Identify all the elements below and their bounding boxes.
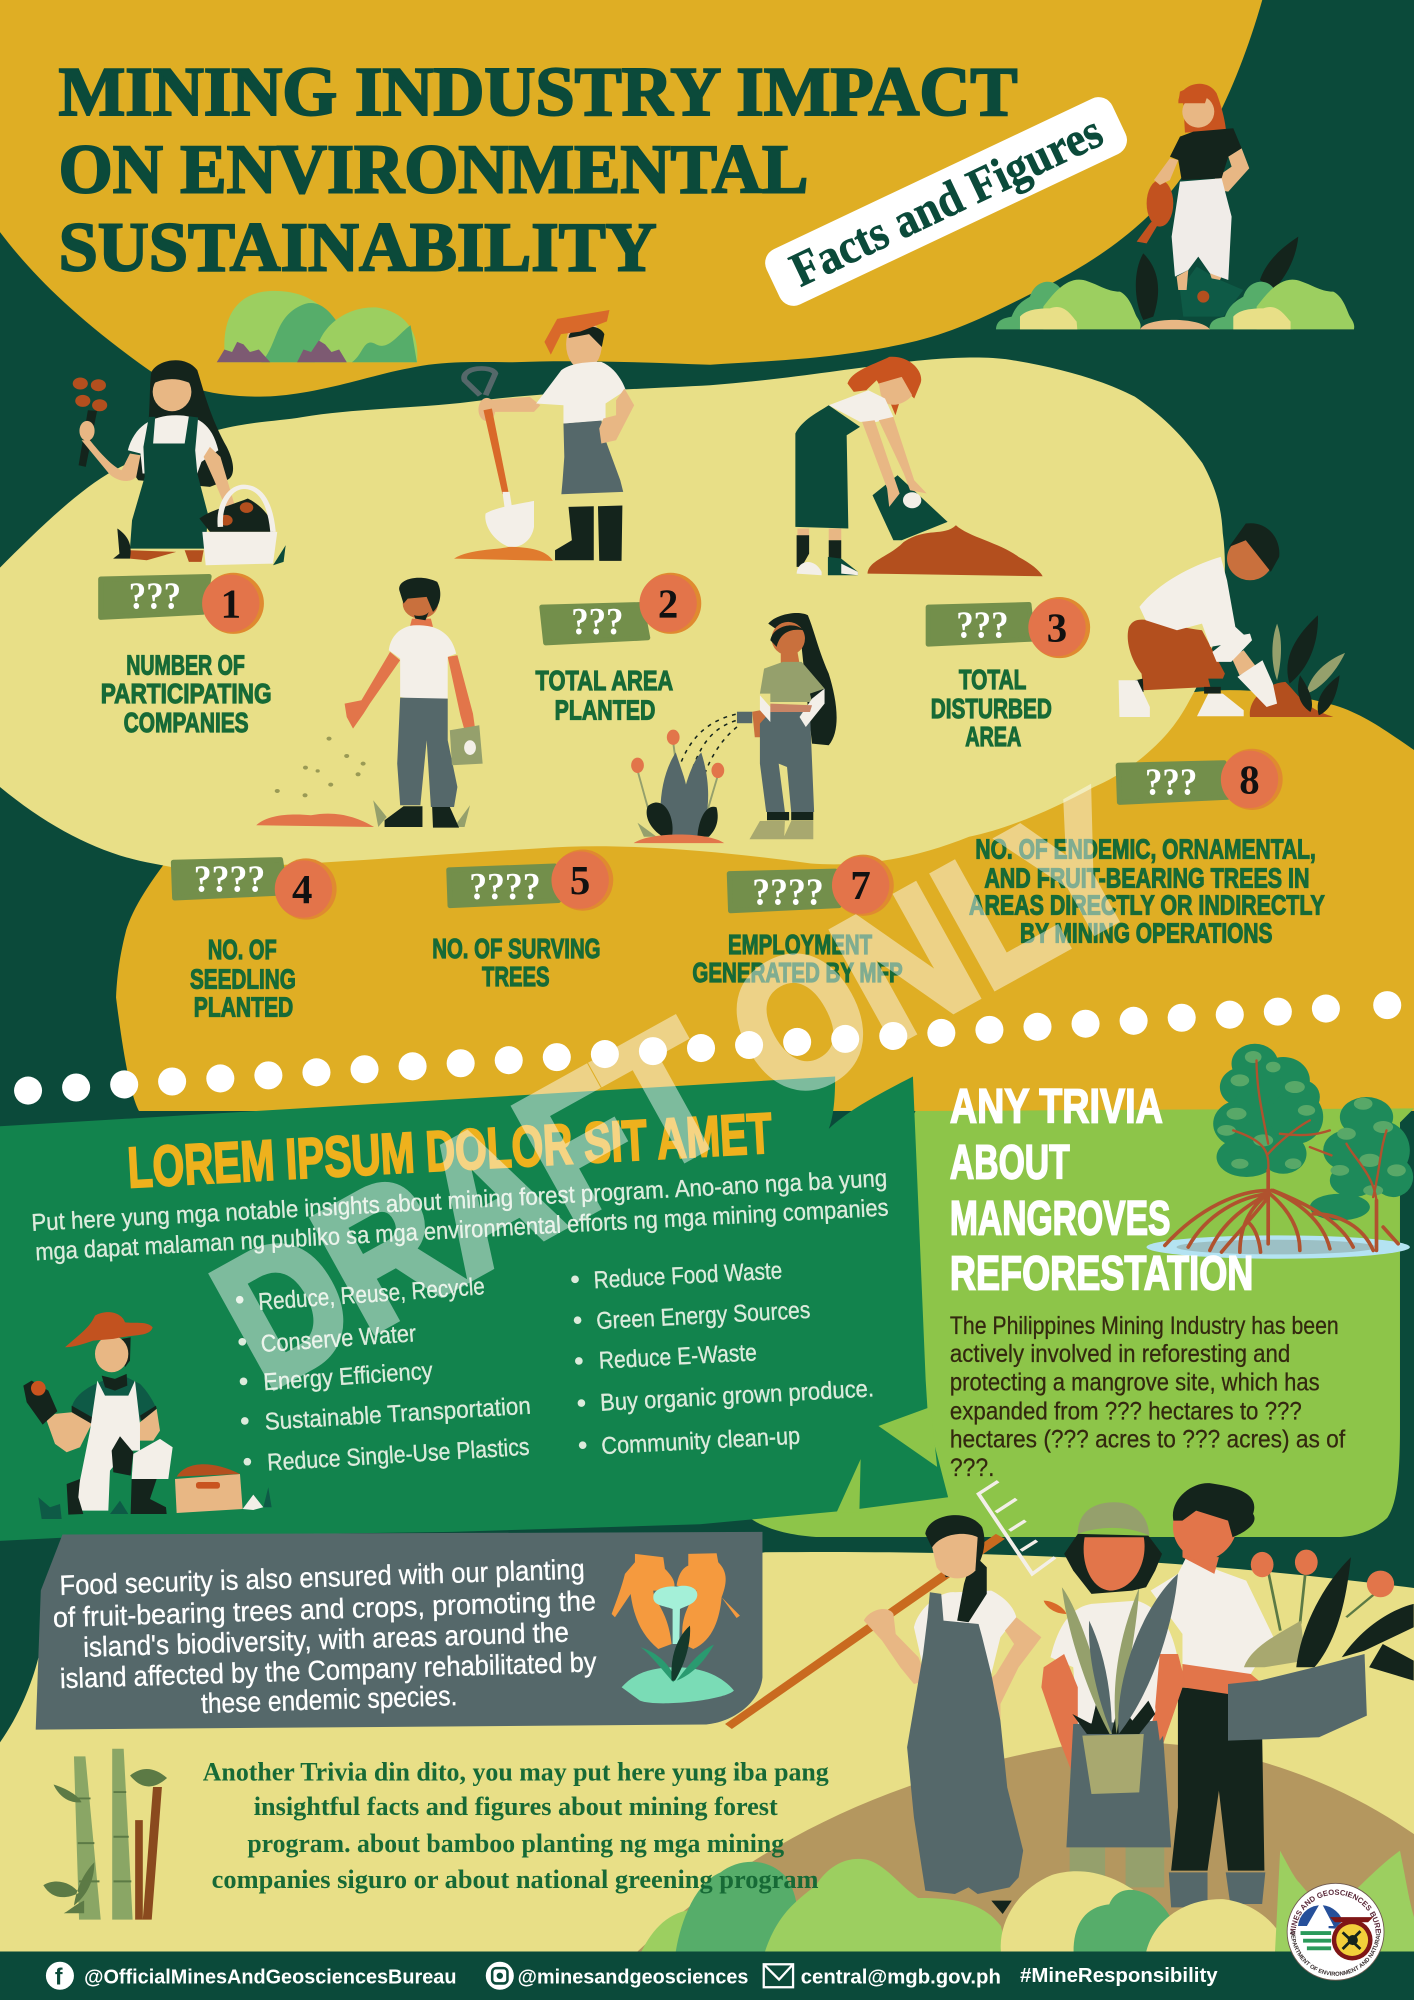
stat 3: total disturbed area: DISTURBED <box>931 693 1052 724</box>
list: left column tips: Conserve Water <box>260 1320 417 1358</box>
footer: facebook handle <box>46 1962 456 1990</box>
stat 5: surviving trees: ???? <box>469 866 541 908</box>
watermark: draft only: DRAFT ONLY <box>185 755 1171 1427</box>
illustration: woman watering plants <box>631 613 837 843</box>
text: mangrove paragraph: protecting a mangrove site, which has <box>950 1368 1320 1396</box>
stat 3: total disturbed area: AREA <box>965 721 1021 752</box>
footer bar <box>0 1952 1414 2000</box>
list: left column tips: Reduce Single-Use Plastics <box>266 1434 530 1477</box>
footer: instagram handle: @minesandgeosciences <box>518 1966 748 1988</box>
text: mangrove paragraph: expanded from ??? hectares to ??? <box>950 1398 1302 1426</box>
text: food security paragraph: these endemic species. <box>201 1680 458 1719</box>
text: mangrove paragraph: hectares (??? acres to ??? acres) as of <box>950 1426 1345 1454</box>
stat 1: participating companies <box>101 573 272 738</box>
stat 2: total area planted <box>536 573 701 725</box>
text: insights paragraph: mga dapat malaman ng publiko sa mga environmental efforts ng mga mining companies <box>35 1195 889 1266</box>
text: food security paragraph <box>51 1553 599 1724</box>
stat 2: total area planted: PLANTED <box>555 694 655 725</box>
stat 1: participating companies: COMPANIES <box>124 707 249 738</box>
text: another trivia: Another Trivia din dito, you may put here yung iba pang <box>203 1757 829 1787</box>
stat 5: surviving trees: TREES <box>482 961 550 992</box>
stat 4: seedling planted <box>173 858 337 1023</box>
illustration: woman with watering can and bushes <box>996 84 1354 329</box>
stat 5: surviving trees: NO. OF SURVING <box>432 933 601 964</box>
text: food security paragraph: island affected by the Company rehabilitated by <box>59 1646 597 1694</box>
stat 3: total disturbed area <box>928 597 1090 752</box>
footer: email: central@mgb.gov.ph <box>801 1966 1001 1988</box>
footer: hashtag: #MineResponsibility <box>1020 1965 1218 1987</box>
illustration: crouching man planting <box>1119 523 1345 717</box>
title: SUSTAINABILITY <box>59 209 657 286</box>
text: insights paragraph: Put here yung mga notable insights about mining forest program. Ano-ano nga ba yung <box>31 1165 888 1237</box>
stat 8: endemic, ornamental and fruit-bearing trees: AND FRUIT-BEARING TREES IN <box>984 863 1309 894</box>
panel: trivia heading <box>950 1079 1253 1301</box>
text: food security paragraph: island's biodiversity, with areas around the <box>83 1617 569 1663</box>
list: left column tips: Reduce, Reuse, Recycle <box>257 1273 486 1316</box>
stat 3: total disturbed area: 3 <box>1047 606 1067 651</box>
list: right column tips: Reduce Food Waste <box>593 1257 783 1294</box>
stat 2: total area planted: ??? <box>571 601 623 643</box>
list: left column tips: Sustainable Transportation <box>264 1393 532 1436</box>
panel: green insights bubble <box>0 1077 948 1541</box>
background: gold header blob <box>0 0 1262 397</box>
background: cream lower field <box>0 1552 1414 1952</box>
text: another trivia: companies siguro or about national greening program <box>212 1864 819 1894</box>
logo: bureau seal: MINES AND GEOSCIENCES BUREAU <box>1290 1890 1381 1934</box>
illustration: man sowing seeds <box>256 578 483 828</box>
text: another trivia <box>203 1757 829 1894</box>
panel: trivia heading: ABOUT <box>950 1136 1070 1190</box>
background: brown hill <box>638 1741 1414 1952</box>
row of white dots <box>14 991 1401 1105</box>
stat 5: surviving trees: 5 <box>570 858 590 903</box>
list: right column tips: Reduce E-Waste <box>598 1339 757 1375</box>
stat 1: participating companies: 1 <box>221 581 241 626</box>
illustration: foreground bushes <box>641 1851 1414 1952</box>
text: mangrove paragraph: ???. <box>950 1454 995 1482</box>
logo: bureau seal: DEPARTMENT OF ENVIRONMENT AND NATURAL RESOURCES <box>1290 1931 1380 1976</box>
heading: lorem ipsum: LOREM IPSUM DOLOR SIT AMET <box>126 1102 774 1200</box>
stat 8: endemic, ornamental and fruit-bearing trees: 8 <box>1239 757 1260 802</box>
stat 4: seedling planted: PLANTED <box>194 992 293 1023</box>
list: right column tips: Buy organic grown produce. <box>599 1375 875 1417</box>
illustration: woman with flowers and basket <box>73 360 286 565</box>
title: ON ENVIRONMENTAL <box>59 132 808 209</box>
stat 4: seedling planted: ???? <box>194 859 265 901</box>
illustration: farmer kneeling with crate <box>23 1312 272 1519</box>
text: mangrove paragraph <box>950 1312 1345 1482</box>
text: mangrove paragraph: actively involved in reforesting and <box>950 1340 1290 1368</box>
list: left column tips <box>236 1273 532 1477</box>
illustration: three gardeners with rake, plant and box <box>725 1481 1414 1914</box>
text: mangrove paragraph: The Philippines Mining Industry has been <box>950 1312 1339 1340</box>
footer: facebook handle: @OfficialMinesAndGeosciencesBureau <box>84 1966 456 1988</box>
stat 3: total disturbed area: ??? <box>956 605 1009 647</box>
icon: bamboo <box>43 1749 167 1920</box>
illustration: woman bending over soil <box>795 357 1043 576</box>
panel: lime trivia bubble <box>750 1108 1414 1537</box>
background: cream blob <box>0 358 1225 869</box>
list: right column tips: Community clean-up <box>601 1423 801 1460</box>
stat 8: endemic, ornamental and fruit-bearing trees <box>969 749 1325 949</box>
title <box>59 54 1017 286</box>
title: MINING INDUSTRY IMPACT <box>59 54 1017 131</box>
stat 1: participating companies: NUMBER OF <box>126 650 245 681</box>
text: another trivia: insightful facts and figures about mining forest <box>254 1791 778 1821</box>
stat 4: seedling planted: SEEDLING <box>190 964 296 995</box>
stat 2: total area planted: 2 <box>658 581 678 626</box>
illustration: man with shovel <box>454 310 634 561</box>
stat 7: employment generated: 7 <box>850 863 871 908</box>
stat 1: participating companies: PARTICIPATING <box>101 678 272 709</box>
text: food security paragraph: of fruit-bearing trees and crops, promoting the <box>52 1585 596 1633</box>
stat 5: surviving trees <box>432 849 613 992</box>
panel: trivia heading: ANY TRIVIA <box>950 1079 1163 1133</box>
text: insights paragraph <box>31 1165 889 1266</box>
panel: trivia heading: REFORESTATION <box>950 1247 1253 1301</box>
stat 4: seedling planted: 4 <box>292 867 312 912</box>
background: gold middle blob <box>116 690 1414 1111</box>
stat 2: total area planted: TOTAL AREA <box>536 665 673 696</box>
illustration: mangrove trees <box>1147 1044 1413 1259</box>
stat 7: employment generated: ???? <box>752 871 824 913</box>
stat 1: participating companies: ??? <box>129 575 181 617</box>
stat 8: endemic, ornamental and fruit-bearing trees: BY MINING OPERATIONS <box>1020 918 1272 949</box>
list: right column tips <box>571 1257 875 1460</box>
icon: hands and sprout <box>612 1553 740 1703</box>
stat 4: seedling planted: NO. OF <box>208 934 277 965</box>
panel: grey food security box <box>36 1532 762 1730</box>
icon: small bushes <box>217 291 417 362</box>
list: left column tips: Energy Efficiency <box>262 1357 434 1396</box>
panel: trivia heading: MANGROVES <box>950 1192 1170 1246</box>
subtitle badge: Facts and Figures: Facts and Figures <box>783 105 1111 297</box>
footer: instagram handle <box>486 1962 748 1990</box>
stat 7: employment generated: EMPLOYMENT <box>728 929 872 960</box>
list: right column tips: Green Energy Sources <box>596 1297 811 1335</box>
lime bubble tail and wedge <box>836 1407 937 1513</box>
stat 3: total disturbed area: TOTAL <box>959 664 1026 695</box>
text: another trivia: program. about bamboo planting ng mga mining <box>247 1828 785 1858</box>
stat 7: employment generated: GENERATED BY MFP <box>692 957 903 988</box>
text: food security paragraph: Food security is also ensured with our planting <box>59 1554 585 1601</box>
stat 8: endemic, ornamental and fruit-bearing trees: ??? <box>1145 762 1197 804</box>
stat 7: employment generated <box>692 855 903 988</box>
footer: facebook handle: f <box>55 1964 63 1990</box>
